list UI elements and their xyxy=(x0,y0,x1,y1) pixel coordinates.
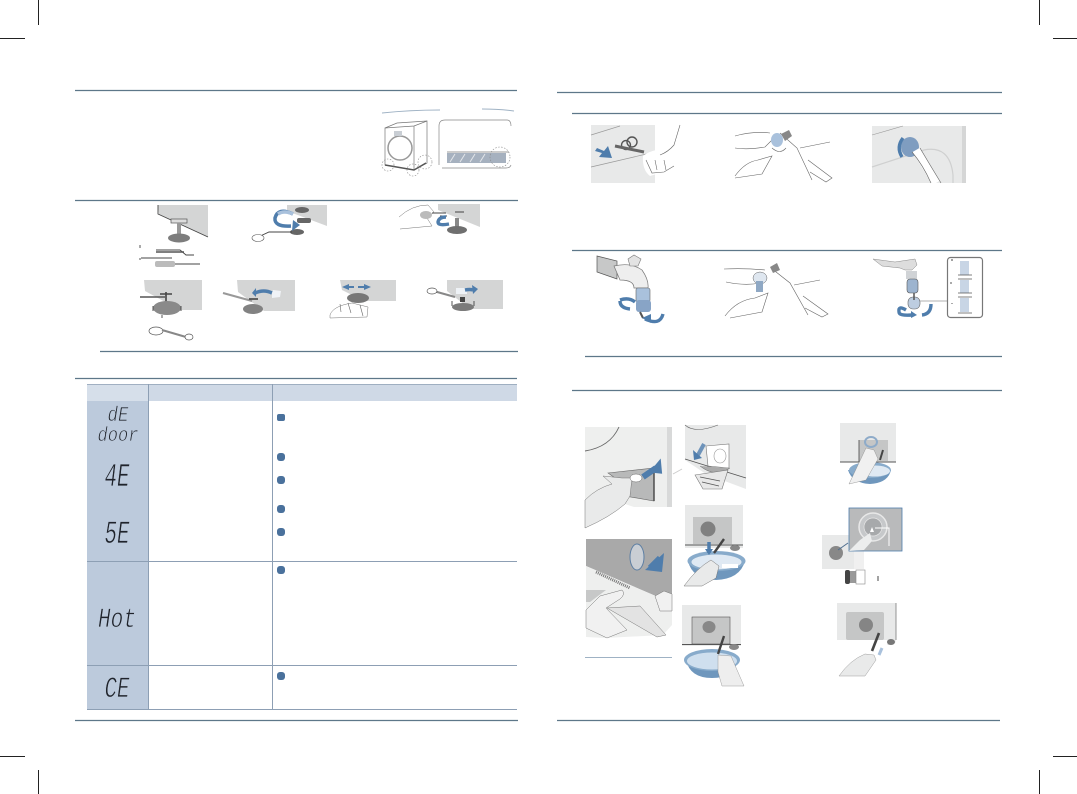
display code: 5E: 5E xyxy=(104,516,130,553)
illustration: pull out filter cover from below xyxy=(673,425,746,489)
display code: dE door xyxy=(98,405,138,448)
inset: filter parts xyxy=(920,258,982,318)
illustration: leveling foot step 2 xyxy=(252,205,327,242)
illustration: detach water hose from washer xyxy=(591,125,680,183)
illustration: rotate filter cap with zoom inset xyxy=(822,508,902,584)
divider under illustration xyxy=(585,656,672,658)
illustration: washer with feet callout xyxy=(382,109,514,176)
illustration: remove filter over bowl xyxy=(840,423,896,484)
illustration: foot row 2 step 3 with hand xyxy=(330,280,396,318)
table header xyxy=(87,384,517,401)
display code: dE door: dE xyxy=(108,405,129,428)
illustration: cleaning filter with brush 1 xyxy=(735,130,832,182)
illustration: filter removal at tap xyxy=(597,255,663,323)
illustration: foot row 2 step 2 xyxy=(223,280,295,314)
illustration: reinsert hose after draining xyxy=(837,603,896,676)
display code: Hot: Hot xyxy=(98,605,136,636)
display code: 4E: 4E xyxy=(104,459,130,496)
code column xyxy=(87,401,148,709)
display code: CE: CE xyxy=(104,673,130,707)
illustration: leveling foot step 3 with hand xyxy=(399,204,480,234)
illustration: cleaning filter with brush 2 xyxy=(724,263,828,318)
illustration: hose drain into bowl xyxy=(684,505,746,586)
illustration: foot row 2 step 4 xyxy=(427,280,503,311)
illustration: reattach water hose xyxy=(872,126,966,183)
illustration: open filter cover xyxy=(585,427,672,528)
bullets xyxy=(277,414,285,680)
illustration: drain water into bowl xyxy=(682,605,744,686)
display code: dE door: door xyxy=(98,425,138,448)
error code table xyxy=(87,384,517,710)
illustration: leveling foot step 1 with tools xyxy=(140,205,208,267)
illustration: foot row 2 step 1 with wrench xyxy=(140,280,202,340)
illustration: reattach filter to tap xyxy=(873,259,931,318)
illustration: press filter cover open xyxy=(586,539,672,638)
